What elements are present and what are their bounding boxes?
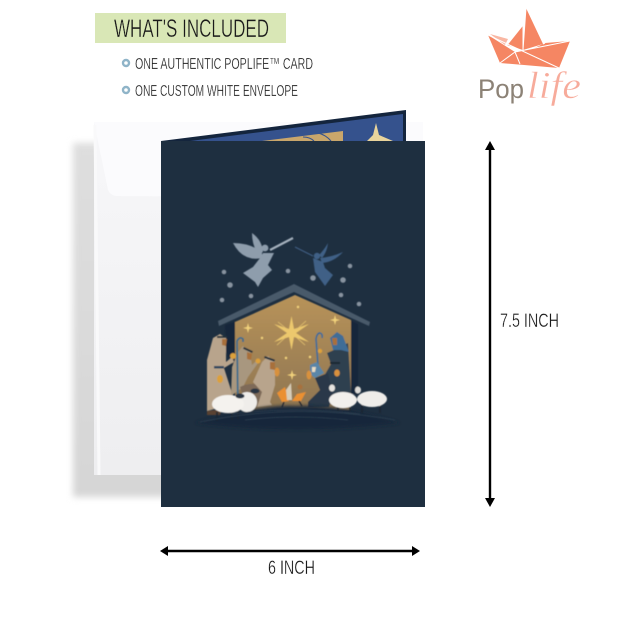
angel: right, with trumpet [295, 243, 343, 286]
figure: Mary kneeling [306, 362, 333, 407]
sheep: right pair [329, 384, 387, 413]
manger with baby [277, 383, 306, 407]
sheep: left pair [212, 388, 260, 421]
shepherd: middle with staff [231, 346, 260, 396]
stable shadow columns [225, 320, 358, 394]
ground texture [200, 410, 395, 422]
shepherd: kneeling [253, 356, 280, 407]
heading: what's included [95, 13, 286, 43]
ground arc [195, 406, 400, 430]
stable roof [218, 284, 370, 326]
list: included items [123, 56, 313, 100]
list: included items: ONE AUTHENTIC POPLIFE™ CARD [135, 56, 313, 73]
falling stars [220, 264, 361, 306]
label: 6 inch: 6 INCH [268, 557, 315, 579]
card front panel [161, 141, 425, 507]
dimension arrow: height [485, 141, 495, 507]
heading: what's included: WHAT'S INCLUDED [114, 15, 269, 43]
staff: shepherd [237, 338, 243, 407]
figure: Joseph standing [316, 332, 351, 398]
sack [240, 384, 267, 408]
star of Bethlehem [274, 316, 309, 350]
card back panel [161, 110, 406, 142]
label: 7.5 inch: 7.5 INCH [500, 310, 559, 332]
envelope with drop shadow [73, 122, 423, 497]
logo: Poplife [478, 8, 581, 107]
angel: left, with trumpet [233, 233, 293, 287]
logo: Poplife: life [527, 65, 581, 107]
dimension arrow: width [160, 546, 420, 556]
logo: Poplife: Pop [478, 74, 524, 104]
small stars [243, 306, 340, 380]
card illustration: nativity scene [195, 233, 400, 430]
stable interior [235, 295, 351, 410]
shepherd: standing left [207, 334, 236, 415]
list: included items: ONE CUSTOM WHITE ENVELOPE [135, 83, 298, 100]
